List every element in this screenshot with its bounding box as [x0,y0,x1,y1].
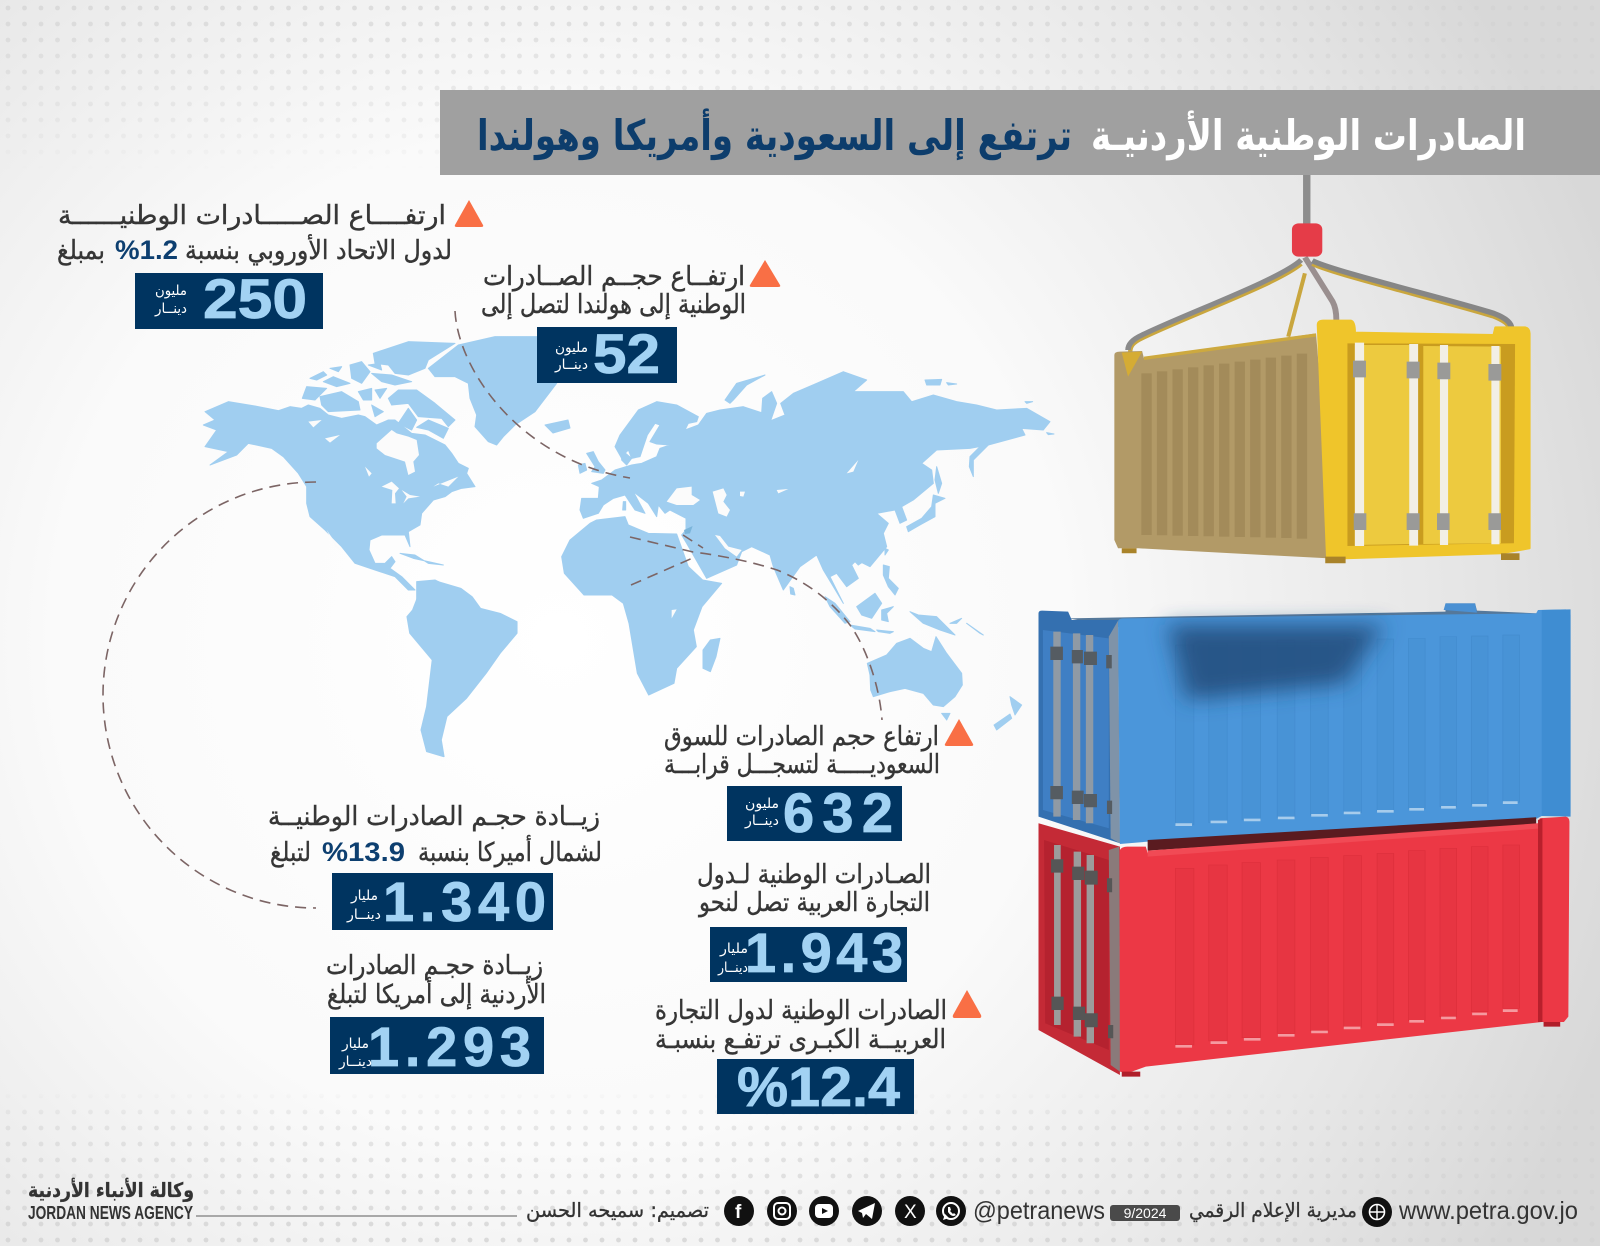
dashed route arcs [103,311,882,908]
department name: مديرية الإعلام الرقمي [1189,1198,1357,1223]
social handle: @petranews [973,1197,1105,1225]
value box 250 [135,267,323,330]
stacked blue and red containers [1038,603,1571,1077]
icon: facebook [724,1196,754,1226]
callout: EU exports: %1.2 [115,235,178,265]
agency logo: وكالة الأنباء الأردنية [28,1177,194,1202]
Southeast Asia and Oceania [825,562,1022,730]
footer [28,1177,1578,1227]
value box 12.4 percent: %12.4 [737,1055,900,1118]
value box 632: دينــار [744,813,779,829]
callout: North America: لشمال أميركا بنسبة [418,834,602,868]
icon: instagram [767,1196,797,1226]
callout: EU exports: بمبلغ [57,236,105,266]
icon: facebook: f [735,1202,742,1223]
value box 1.293: دينــار [338,1054,372,1070]
yellow container hanging [1114,175,1529,563]
value box 1.943: 1.943 [745,921,903,984]
icon: globe [1362,1197,1392,1227]
value box 52 [537,322,677,385]
callout: Netherlands exports: ارتفــاع حجــم الصــادرات [483,262,745,292]
value box 52: دينــار [554,357,588,373]
callout: Saudi exports [664,719,973,844]
blue container [1038,603,1571,844]
value box 1.943: دينــار [717,960,748,976]
website: www.petra.gov.jo [1398,1197,1578,1225]
icon: youtube [809,1196,839,1226]
callout: Arab trade exports: الصـادرات الوطنية لـدول [697,860,931,890]
icon: up triangle [455,200,483,227]
value box 1.340: مليار [350,888,378,904]
callout: Netherlands exports: الوطنية إلى هولندا لتصل إلى [481,290,746,320]
Jordan marker [684,526,693,534]
value box 52: مليون [555,340,588,356]
value box 1.943: مليار [719,941,748,957]
designer credit: تصميم: سميحه الحسن [526,1198,709,1222]
South America [407,582,517,757]
icon: up triangle [953,990,981,1018]
agency logo [28,1177,194,1223]
date badge: 9/2024 [1124,1205,1167,1221]
world map [203,337,1054,757]
Iceland [545,420,570,433]
value box 250: دينــار [154,301,187,317]
North America and Greenland [203,337,557,600]
callout: North America: زيــادة حجـم الصادرات الوطنيــة [268,802,600,832]
callout: Arab trade exports: التجارة العربية تصل لنحو [697,888,930,918]
callout: Saudi exports: ارتفاع حجم الصادرات للسوق [664,722,939,752]
value box 52: 52 [593,322,660,385]
icon: X: X [904,1202,917,1223]
callout: Greater Arab trade: العربيــة الكبـرى ترتفـع بنسبـة [655,1025,946,1055]
callout: North America [268,802,602,933]
callout: Greater Arab trade: الصادرات الوطنية لدول التجارة [655,996,947,1026]
agency logo: JORDAN NEWS AGENCY [28,1203,193,1223]
value box 1.293: 1.293 [368,1015,531,1078]
callout: America: الأردنية إلى أمريكا لتبلغ [327,976,546,1010]
icon: whatsapp [936,1196,966,1226]
value box 1.340: 1.340 [383,870,546,933]
callout: North America: لتبلغ [270,838,311,868]
value box 1.340: دينــار [346,907,381,923]
value box 632: 632 [783,781,893,844]
callout: America [326,951,546,1078]
icon: X [895,1196,925,1226]
icon: telegram [852,1196,882,1226]
callout: EU exports: ارتفــــاع الصـــــادرات الوطنيــــــة [58,201,446,231]
callout: America: زيــادة حجـم الصادرات [326,951,543,981]
callout: Saudi exports: السعوديـــــة لتسجـــل قرابـــة [664,750,940,780]
value box 632 [727,781,902,844]
icon: up triangle [750,260,780,287]
title bar [440,90,1600,175]
callout: Netherlands exports [481,260,780,385]
title navy part: ترتفع إلى السعودية وأمريكا وهولندا [477,108,1072,161]
value box 1.293: مليار [341,1036,369,1052]
value box 250: مليون [155,283,187,299]
red container [1038,817,1569,1077]
date badge [1110,1205,1180,1221]
callout: Greater Arab trade [655,990,981,1118]
callout: EU exports: لدول الاتحاد الأوروبي بنسبة [185,233,452,266]
callout: North America: %13.9 [322,837,405,867]
icon: up triangle [945,719,973,746]
value box 250: 250 [203,267,307,330]
Eurasia and Africa [562,372,1054,695]
value box 632: مليون [745,796,779,812]
callout: Arab trade exports [697,860,931,984]
callout: EU exports [57,200,483,330]
